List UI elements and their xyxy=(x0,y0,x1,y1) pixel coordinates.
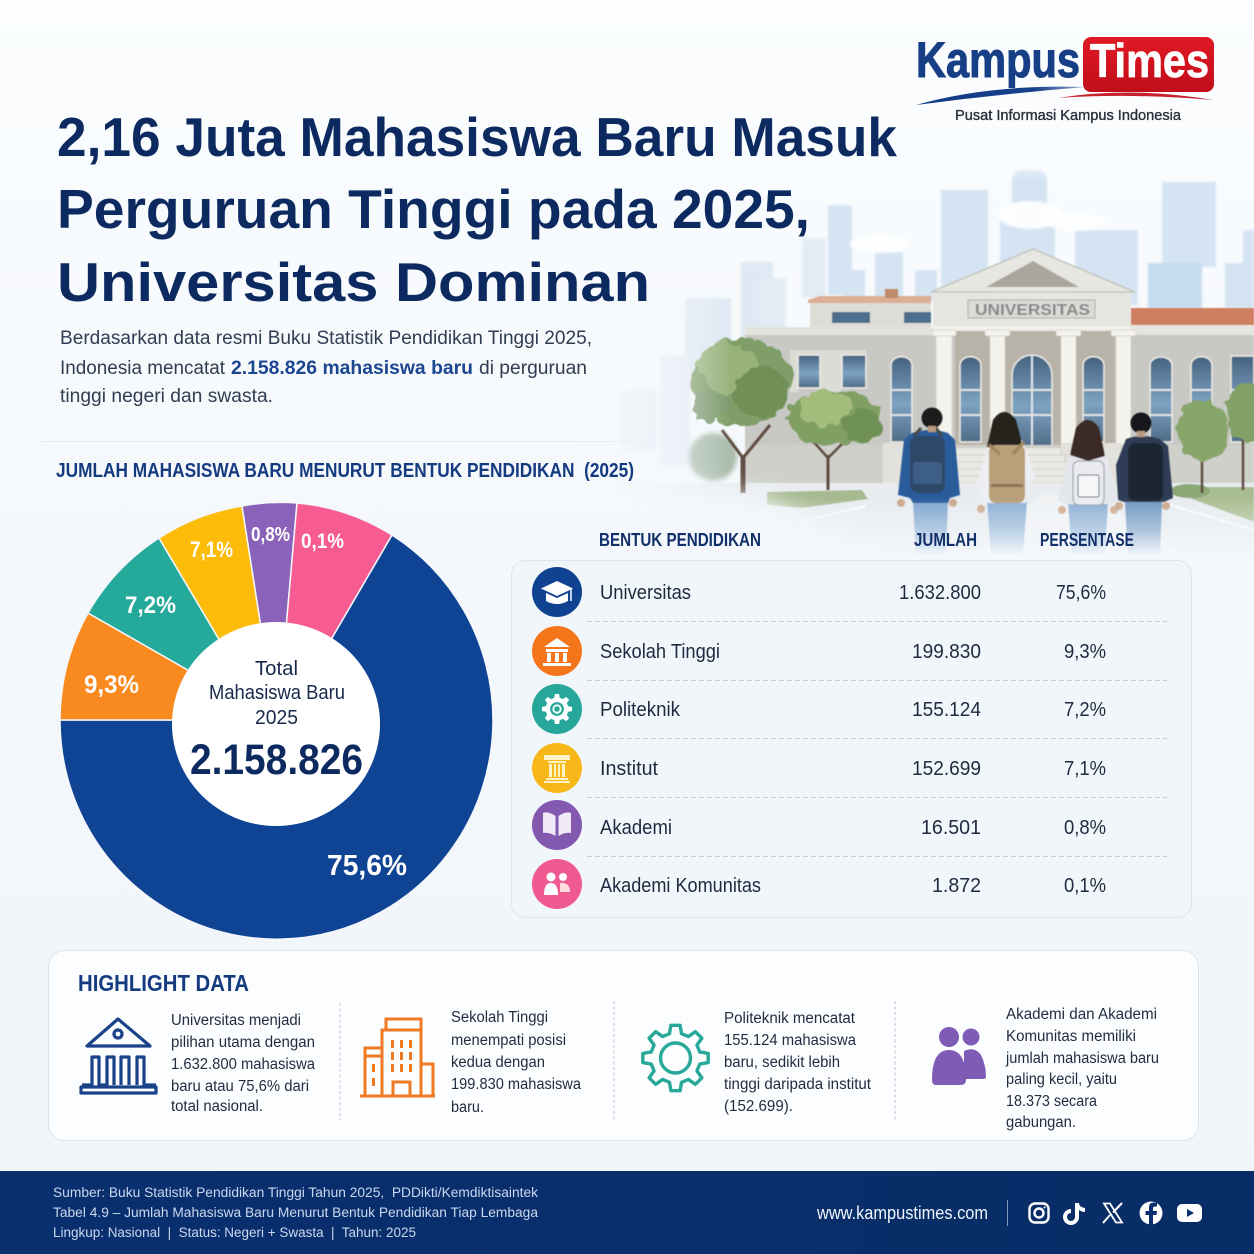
title: Perguruan Tinggi pada 2025, xyxy=(57,178,810,240)
highlight: Politeknik: baru, sedikit lebih xyxy=(724,1054,840,1071)
icon: tiktok xyxy=(1063,1203,1085,1225)
columns xyxy=(932,330,1136,445)
slice: Universitas xyxy=(60,535,493,939)
row: Politeknik: 155.124 xyxy=(912,699,981,721)
row: Akademi Komunitas: Akademi Komunitas xyxy=(600,875,761,897)
slice: Institut xyxy=(159,506,263,658)
highlight: Akademi dan Akademi Komunitas: jumlah mahasiswa baru xyxy=(1005,1050,1159,1067)
intro paragraph xyxy=(60,328,592,407)
highlight heading: HIGHLIGHT DATA xyxy=(78,970,249,996)
center total label: Mahasiswa Baru xyxy=(209,682,345,704)
highlight: Universitas xyxy=(81,1012,315,1115)
label 7,2%: 7,2% xyxy=(125,592,176,619)
row: Sekolah Tinggi xyxy=(532,626,1106,676)
icon: graduation cap xyxy=(532,567,582,617)
table headers xyxy=(599,530,1134,550)
label 7,1%: 7,1% xyxy=(190,537,233,562)
source notes: Lingkup: Nasional | Status: Negeri + Swasta | Tahun: 2025 xyxy=(53,1225,416,1240)
trees xyxy=(689,338,1254,493)
slice: Sekolah Tinggi xyxy=(60,613,200,720)
highlight: Universitas: 1.632.800 mahasiswa xyxy=(171,1056,315,1073)
student 3 xyxy=(1058,420,1118,556)
icon: youtube xyxy=(1177,1204,1202,1222)
icon: two people xyxy=(932,1027,986,1085)
highlight: Sekolah Tinggi: menempati posisi xyxy=(451,1032,566,1049)
student 2 xyxy=(976,412,1036,556)
row: Akademi Komunitas: 1.872 xyxy=(932,875,981,897)
logo: tagline: Pusat Informasi Kampus Indonesia xyxy=(955,108,1182,124)
label 9,3%: 9,3% xyxy=(84,671,139,699)
donut chart xyxy=(60,502,493,939)
label 75,6%: 75,6% xyxy=(327,850,407,882)
icon: outline gear xyxy=(643,1025,708,1091)
logo xyxy=(916,32,1214,124)
row: Akademi Komunitas: 0,1% xyxy=(1064,875,1106,897)
student 1 xyxy=(897,408,960,556)
website: www.kampustimes.com xyxy=(816,1203,988,1223)
panel: data table xyxy=(512,560,1192,918)
intro paragraph: 2.158.826 mahasiswa baru xyxy=(231,358,473,379)
highlight: Universitas: baru atau 75,6% dari xyxy=(171,1078,309,1095)
building sign: UNIVERSITAS xyxy=(975,302,1090,319)
icon: gear xyxy=(532,684,582,734)
intro paragraph: Berdasarkan data resmi Buku Statistik Pendidikan Tinggi 2025, xyxy=(60,328,592,349)
table headers: BENTUK PENDIDIKAN xyxy=(599,530,761,550)
highlight: Sekolah Tinggi: kedua dengan xyxy=(451,1054,545,1071)
illustration: university campus with students and skyline xyxy=(620,170,1254,573)
icon: office towers xyxy=(360,1019,435,1096)
intro paragraph: di perguruan xyxy=(479,358,587,379)
skyline xyxy=(620,170,1254,465)
table headers: PERSENTASE xyxy=(1040,530,1134,550)
highlight: Akademi dan Akademi Komunitas: gabungan. xyxy=(1006,1114,1076,1131)
row: Sekolah Tinggi: 199.830 xyxy=(912,641,981,663)
icon: institution building xyxy=(532,626,582,676)
row: Institut xyxy=(532,743,1106,793)
highlight: Universitas: total nasional. xyxy=(171,1098,263,1115)
source notes: Sumber: Buku Statistik Pendidikan Tinggi Tahun 2025, PDDikti/Kemdiktisaintek xyxy=(53,1185,538,1200)
icon: people xyxy=(532,859,582,909)
highlight: Universitas: Universitas menjadi xyxy=(171,1012,301,1029)
row: Universitas xyxy=(532,567,1106,617)
row: Sekolah Tinggi: 9,3% xyxy=(1064,641,1106,663)
label 0,8%: 0,8% xyxy=(251,524,290,546)
highlight: Politeknik: 155.124 mahasiswa xyxy=(724,1032,856,1049)
building xyxy=(716,248,1254,526)
footer xyxy=(0,1171,1254,1254)
row: Politeknik xyxy=(532,684,1106,734)
highlight: Sekolah Tinggi: Sekolah Tinggi xyxy=(451,1009,548,1026)
highlight: Universitas: pilihan utama dengan xyxy=(171,1034,315,1051)
highlight: Sekolah Tinggi xyxy=(360,1009,581,1116)
slice: Akademi xyxy=(242,502,297,640)
highlight: Akademi dan Akademi Komunitas: 18.373 secara xyxy=(1006,1093,1097,1110)
chart heading: JUMLAH MAHASISWA BARU MENURUT BENTUK PENDIDIKAN (2025) xyxy=(56,460,634,482)
row: Akademi Komunitas xyxy=(532,859,1106,909)
students xyxy=(897,408,1173,556)
center total label: Total xyxy=(255,658,298,680)
highlight: Sekolah Tinggi: 199.830 mahasiswa xyxy=(451,1076,581,1093)
title: Universitas Dominan xyxy=(57,251,650,313)
center total label: 2.158.826 xyxy=(190,736,363,784)
slice: Akademi Komunitas xyxy=(285,503,392,655)
tree trunks xyxy=(722,425,1243,493)
row: Politeknik: Politeknik xyxy=(600,699,681,721)
row: Institut: 7,1% xyxy=(1064,758,1106,780)
source notes: Tabel 4.9 – Jumlah Mahasiswa Baru Menurut Bentuk Pendidikan Tiap Lembaga xyxy=(53,1205,538,1220)
row: Sekolah Tinggi: Sekolah Tinggi xyxy=(600,641,720,663)
row: Akademi: 16.501 xyxy=(921,817,981,839)
icon: open book xyxy=(532,800,582,850)
table headers: JUMLAH xyxy=(914,530,977,550)
tree crowns xyxy=(692,338,1254,461)
slice: Politeknik xyxy=(88,538,230,677)
row: Politeknik: 7,2% xyxy=(1064,699,1106,721)
highlight: Politeknik: tinggi daripada institut xyxy=(724,1076,872,1093)
title: 2,16 Juta Mahasiswa Baru Masuk xyxy=(57,106,897,168)
logo: swoosh xyxy=(916,87,1213,105)
row: Universitas: Universitas xyxy=(600,582,691,604)
highlight: Akademi dan Akademi Komunitas: Komunitas memiliki xyxy=(1006,1028,1136,1045)
title xyxy=(57,106,897,313)
row: Institut: 152.699 xyxy=(912,758,981,780)
donut hole xyxy=(172,622,380,826)
highlight: Politeknik: Politeknik mencatat xyxy=(724,1010,856,1027)
row: Universitas: 1.632.800 xyxy=(899,582,981,604)
center total label: 2025 xyxy=(255,707,298,729)
logo: Times red badge: Times xyxy=(1090,34,1209,87)
source notes xyxy=(53,1185,538,1240)
student 4 xyxy=(1115,412,1173,556)
intro paragraph: tinggi negeri dan swasta. xyxy=(60,386,273,407)
highlight: Politeknik: (152.699). xyxy=(724,1098,793,1115)
intro paragraph: Indonesia mencatat xyxy=(60,358,226,379)
highlight: Politeknik xyxy=(643,1010,872,1115)
row: Akademi: 0,8% xyxy=(1064,817,1106,839)
icon: X xyxy=(1103,1203,1122,1223)
row: Akademi xyxy=(532,800,1106,850)
highlight: Akademi dan Akademi Komunitas: Akademi dan Akademi xyxy=(1006,1006,1157,1023)
icon: instagram xyxy=(1030,1204,1048,1222)
row: Institut: Institut xyxy=(600,758,658,780)
center total label xyxy=(190,658,363,784)
logo: Kampus wordmark: Kampus xyxy=(916,32,1080,88)
label 0,1%: 0,1% xyxy=(301,530,344,553)
highlight: Akademi dan Akademi Komunitas: paling kecil, yaitu xyxy=(1006,1071,1117,1088)
panel: highlight data xyxy=(48,950,1198,1140)
icon: facebook xyxy=(1140,1202,1162,1225)
highlight: Akademi dan Akademi Komunitas xyxy=(932,1006,1159,1131)
row: Universitas: 75,6% xyxy=(1056,582,1106,604)
highlight: Sekolah Tinggi: baru. xyxy=(451,1099,484,1116)
row: Akademi: Akademi xyxy=(600,817,672,839)
icon: pillar xyxy=(532,743,582,793)
icon: campus building xyxy=(81,1019,156,1093)
